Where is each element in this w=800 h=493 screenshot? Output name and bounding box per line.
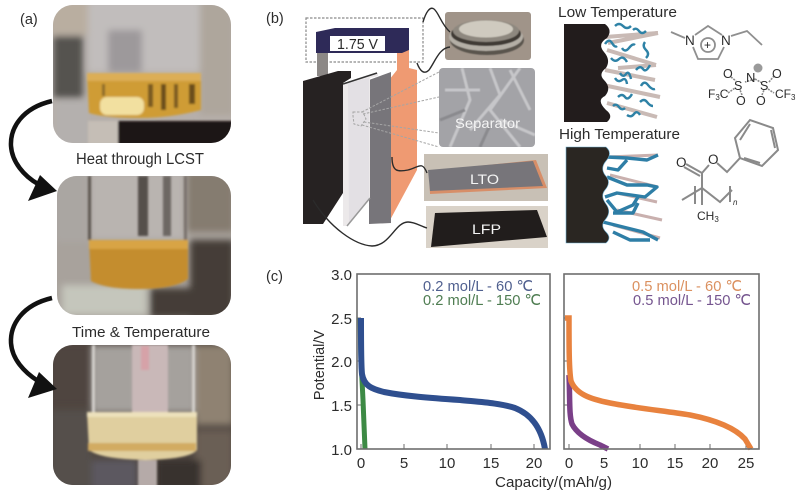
anion structure xyxy=(708,64,796,108)
polymer structure: CH xyxy=(697,209,714,223)
x axis labels: 10 xyxy=(632,455,648,472)
cation structure xyxy=(671,26,762,59)
panel c: discharge charts xyxy=(266,267,759,491)
anion structure: C xyxy=(720,87,729,101)
curve: 150 C xyxy=(569,375,608,449)
x axis labels: 25 xyxy=(738,455,754,472)
heading: low temperature: Low Temperature xyxy=(558,4,677,21)
polymer structure xyxy=(676,120,778,224)
anion structure: O xyxy=(772,67,782,81)
chart: 0.5 mol/L: 0.5 mol/L - 150 ℃ xyxy=(633,292,751,309)
black LFP electrode xyxy=(303,71,351,224)
x axis labels xyxy=(565,455,754,472)
x axis labels: 15 xyxy=(667,455,683,472)
cation structure: N xyxy=(685,33,695,48)
photo: vial with clear amber liquid and polymer blob xyxy=(50,0,234,145)
photo: vial turned turbid amber xyxy=(55,172,234,320)
x axis labels xyxy=(357,455,542,472)
photo: LTO electrode xyxy=(424,154,548,201)
x axis labels: 0 xyxy=(565,455,573,472)
photo: vial with gelled pale electrolyte xyxy=(50,345,233,490)
arrow: first step xyxy=(11,101,57,201)
y axis labels: 1.5 xyxy=(331,398,352,415)
collapsed polymer on fibers xyxy=(566,147,662,243)
photo: LFP electrode xyxy=(426,206,548,248)
gray lead xyxy=(317,52,328,76)
orange current collector xyxy=(389,50,417,222)
y axis labels: 3.0 xyxy=(331,267,352,284)
y axis title: Potential/V xyxy=(312,330,328,400)
anion structure: CF xyxy=(775,87,791,101)
electrode surface xyxy=(566,147,610,243)
polymer structure: n xyxy=(733,198,738,207)
anion structure: O xyxy=(723,67,733,81)
photo: separator micrograph xyxy=(439,68,535,147)
anion structure: F xyxy=(708,87,715,101)
label (a): (a) xyxy=(20,12,38,28)
polymer structure: 3 xyxy=(714,215,719,224)
curve: 60 C xyxy=(361,318,545,449)
gray LTO electrode xyxy=(369,72,391,224)
x axis labels: 20 xyxy=(526,455,542,472)
label (b): (b) xyxy=(266,11,284,27)
y axis labels: 2.0 xyxy=(331,354,352,371)
arrow: second step xyxy=(11,298,57,398)
photo: separator micrograph: Separator xyxy=(455,115,520,131)
wires xyxy=(313,8,450,246)
separator sheet xyxy=(343,73,378,226)
panel b right: low temperature schematic xyxy=(558,4,796,122)
electrode surface xyxy=(564,24,610,122)
panel b: battery schematic xyxy=(266,8,548,248)
x axis title: Capacity/(mAh/g) xyxy=(495,474,612,491)
anion structure: S xyxy=(734,79,742,93)
label (c): (c) xyxy=(266,269,283,285)
y axis labels: 1.0 xyxy=(331,442,352,459)
anion structure: 3 xyxy=(715,93,720,102)
heading: high temperature: High Temperature xyxy=(559,126,680,143)
cation structure: + xyxy=(704,38,711,52)
y axis labels xyxy=(331,267,352,459)
dashed zoom lines to separator xyxy=(353,72,439,147)
legend: 0.2 mol/L - 60 ℃ xyxy=(423,278,533,295)
anion structure: S xyxy=(760,79,768,93)
legend: 0.5 mol/L - 60 ℃ xyxy=(632,278,742,295)
voltmeter: 1.75 V xyxy=(337,37,378,53)
photo: LTO electrode: LTO xyxy=(470,171,499,187)
chart: 0.5 mol/L xyxy=(564,274,759,472)
anion structure: O xyxy=(736,94,746,108)
anion structure: N xyxy=(746,70,755,85)
polymer structure: O xyxy=(676,155,687,170)
caption: heat through LCST: Heat through LCST xyxy=(76,151,205,168)
x axis labels: 5 xyxy=(400,455,408,472)
caption: time and temperature: Time & Temperature xyxy=(72,324,210,341)
curve: 60 C xyxy=(565,318,751,449)
x axis labels: 20 xyxy=(702,455,718,472)
voltmeter xyxy=(316,28,409,53)
panel a: heating sequence of vials xyxy=(11,0,234,490)
x axis labels: 10 xyxy=(439,455,455,472)
dashed inset box xyxy=(306,18,423,62)
panel b right: high temperature schematic xyxy=(559,120,778,243)
photo: LFP electrode: LFP xyxy=(472,221,501,237)
x axis labels: 5 xyxy=(600,455,608,472)
x axis labels: 0 xyxy=(357,455,365,472)
cation structure: N xyxy=(721,33,731,48)
curve: 150 C xyxy=(360,318,365,449)
y axis labels: 2.5 xyxy=(331,311,352,328)
anion structure: O xyxy=(756,94,766,108)
anion structure: 3 xyxy=(791,93,796,102)
fibers and ionic liquid in swollen state xyxy=(564,24,660,122)
x axis labels: 15 xyxy=(483,455,499,472)
chart: 0.2 mol/L xyxy=(357,274,550,472)
cell stack diagram xyxy=(303,18,423,226)
photo: coin cell xyxy=(445,12,531,60)
polymer structure: O xyxy=(708,152,719,167)
chart: 0.2 mol/L: 0.2 mol/L - 150 ℃ xyxy=(423,292,541,309)
